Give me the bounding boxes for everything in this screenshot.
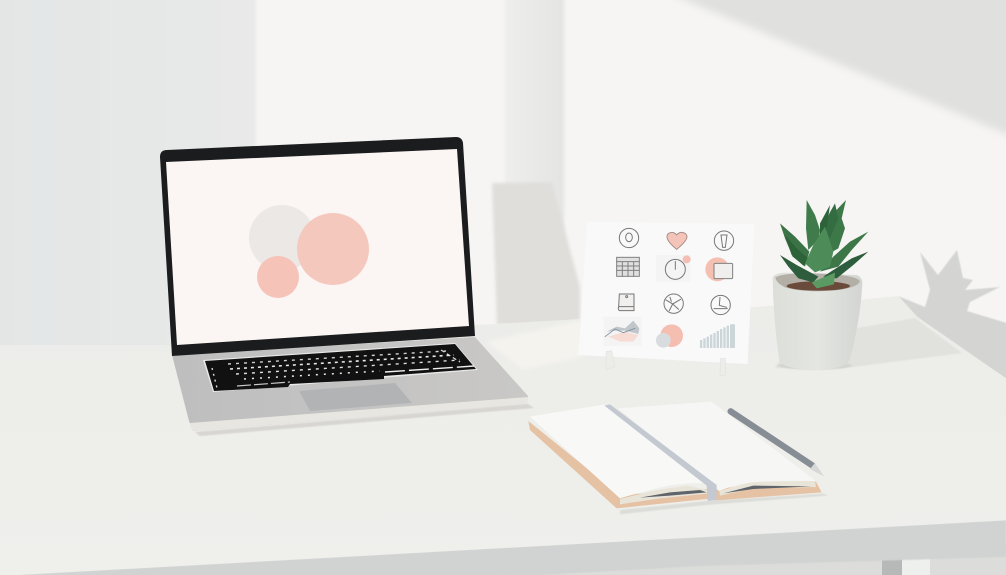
laptop — [160, 137, 534, 436]
area chart — [603, 317, 642, 346]
laptop shadow — [195, 404, 534, 436]
icon: badge — [714, 231, 734, 250]
icon: heart — [667, 232, 687, 249]
icon: ring — [619, 228, 639, 248]
left page — [530, 404, 705, 498]
left curl shadow — [640, 490, 707, 498]
icon: notebook — [618, 294, 634, 311]
laptop base — [172, 337, 528, 431]
right page — [618, 402, 816, 491]
box shadow on wall — [492, 182, 580, 325]
icon: gauge circle — [711, 295, 730, 315]
pot shadow — [778, 362, 852, 370]
icon: clock — [656, 255, 691, 282]
pen — [731, 411, 824, 476]
right page block — [719, 481, 816, 496]
screen circle small — [257, 256, 299, 298]
screen circle gray — [249, 205, 315, 271]
right curl shadow — [723, 486, 812, 493]
plant shadow on desk — [775, 318, 962, 368]
desk top — [0, 296, 1006, 575]
laptop lid bezel — [160, 137, 475, 356]
keyboard — [203, 343, 478, 392]
bar chart — [700, 324, 735, 348]
notebook and pen — [528, 402, 828, 514]
pot body — [773, 273, 862, 370]
plant shadow on wall — [898, 250, 1006, 382]
light patch on desk — [487, 320, 582, 370]
icon: tablet with peach circle — [705, 257, 733, 281]
icon card — [578, 222, 754, 376]
laptop screen — [166, 149, 469, 345]
pot rim interior — [775, 273, 860, 291]
card panel — [578, 222, 754, 364]
soil — [787, 281, 850, 291]
icon: calendar — [617, 257, 639, 276]
notebook shadow — [620, 494, 828, 514]
left page block — [620, 486, 707, 504]
icon: brain circle — [664, 294, 683, 313]
laptop front edge — [190, 397, 528, 431]
potted plant pot — [773, 273, 862, 370]
card stand feet — [606, 351, 725, 376]
wall background — [0, 0, 1006, 360]
aloe leaves — [780, 200, 868, 288]
notebook cover — [528, 421, 822, 508]
screen circle large — [297, 213, 369, 285]
pie graphic — [656, 324, 683, 348]
desk front edge and floor — [0, 520, 1006, 575]
trackpad — [299, 383, 412, 411]
elastic band — [604, 404, 717, 501]
